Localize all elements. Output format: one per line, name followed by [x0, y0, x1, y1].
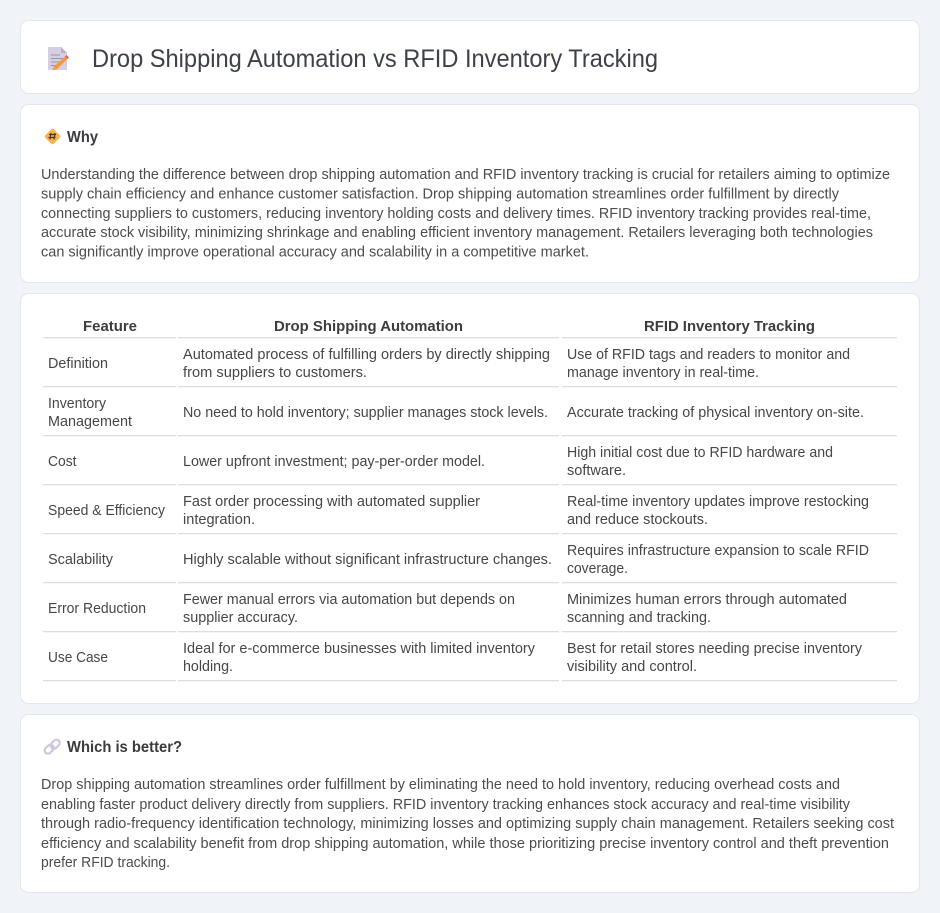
row: use case: Best for retail stores needing precise inventory [567, 641, 863, 657]
table header row: Feature [83, 318, 137, 335]
text block: why paragraph: connecting suppliers to customers, reducing inventory holding costs and delivery times. RFID inventory tracking provides real-time, [41, 206, 871, 222]
panel: title header [20, 20, 920, 94]
text block: which is better paragraph: efficiency and scalability benefit from drop shipping automation, while those prioritizing precise inventory control and theft prevention [41, 836, 889, 852]
icon: warning diamond [44, 128, 61, 145]
panel: which is better [20, 714, 920, 892]
row: inventory management [48, 396, 864, 430]
row: error reduction [48, 592, 847, 626]
text block: why paragraph: Understanding the difference between drop shipping automation and RFID inventory tracking is crucial for retailers aiming to optimize [41, 167, 890, 183]
row: use case: Use Case [48, 650, 108, 666]
row: speed and efficiency: Real-time inventory updates improve restocking [567, 494, 869, 510]
icon: document with pencil [48, 47, 69, 70]
row: scalability: Highly scalable without significant infrastructure changes. [183, 552, 552, 568]
row: error reduction: Minimizes human errors through automated [567, 592, 847, 608]
text block: why paragraph: supply chain efficiency and enhance customer satisfaction. Drop shipping automation streamlines order fulfillment by directly [41, 186, 840, 202]
row: definition: from suppliers to customers. [183, 365, 367, 381]
row: speed and efficiency: and reduce stockouts. [567, 512, 708, 528]
icon: chain link [43, 738, 61, 755]
row: scalability: Requires infrastructure expansion to scale RFID [567, 543, 869, 559]
row: definition: manage inventory in real-time. [567, 365, 759, 381]
panel: why [20, 104, 920, 282]
text block: which is better paragraph: enabling faster product delivery directly from suppliers. RFID inventory tracking enhances stock accuracy and real-time visibility [41, 797, 851, 813]
row: error reduction: supplier accuracy. [183, 610, 298, 626]
row: error reduction: Fewer manual errors via automation but depends on [183, 592, 515, 608]
row: definition [48, 347, 850, 381]
table header row: RFID Inventory Tracking [644, 318, 815, 335]
row: use case: holding. [183, 659, 233, 675]
heading: which is better: Which is better? [67, 739, 182, 756]
row: inventory management: Accurate tracking of physical inventory on-site. [567, 405, 864, 421]
text block: which is better paragraph: prefer RFID tracking. [41, 855, 170, 871]
row: definition: Definition [48, 356, 108, 372]
text block: why paragraph: can significantly improve operational accuracy and scalability in a competitive market. [41, 244, 589, 260]
row: speed and efficiency [48, 494, 869, 528]
title: Drop Shipping Automation vs RFID Inventory Tracking [92, 45, 658, 73]
row: cost [48, 445, 833, 479]
row: inventory management: No need to hold inventory; supplier manages stock levels. [183, 405, 548, 421]
row: cost: High initial cost due to RFID hardware and [567, 445, 833, 461]
row: inventory management: Inventory [48, 396, 107, 412]
row: error reduction: scanning and tracking. [567, 610, 711, 626]
text block: why paragraph: accurate stock visibility, minimizing shrinkage and enabling efficient inventory management. Retailers leveraging both technologies [41, 225, 873, 241]
row: speed and efficiency: Fast order processing with automated supplier [183, 494, 480, 510]
text block: why paragraph [41, 167, 890, 260]
row: speed and efficiency: integration. [183, 512, 255, 528]
row: cost: Lower upfront investment; pay-per-order model. [183, 454, 485, 470]
text block: which is better paragraph: through radio-frequency identification technology, minimizing losses and optimizing supply chain management. Retailers seeking cost [41, 816, 894, 832]
row: scalability: Scalability [48, 552, 114, 568]
text block: which is better paragraph [41, 777, 894, 871]
row: cost: software. [567, 463, 626, 479]
row: scalability: coverage. [567, 561, 628, 577]
row: scalability [48, 543, 869, 577]
row: error reduction: Error Reduction [48, 601, 146, 617]
row: inventory management: Management [48, 414, 132, 430]
row: cost: Cost [48, 454, 77, 470]
row: use case: visibility and control. [567, 659, 697, 675]
table header row [83, 318, 815, 335]
row: speed and efficiency: Speed & Efficiency [48, 503, 166, 519]
text block: which is better paragraph: Drop shipping automation streamlines order fulfillment by eliminating the need to hold inventory, reducing overhead costs and [41, 777, 840, 793]
panel: comparison table [20, 294, 920, 704]
row: use case [48, 641, 863, 675]
row: use case: Ideal for e-commerce businesses with limited inventory [183, 641, 536, 657]
row: definition: Use of RFID tags and readers to monitor and [567, 347, 850, 363]
heading: why: Why [67, 129, 98, 146]
table header row: Drop Shipping Automation [274, 318, 463, 335]
row: definition: Automated process of fulfilling orders by directly shipping [183, 347, 550, 363]
